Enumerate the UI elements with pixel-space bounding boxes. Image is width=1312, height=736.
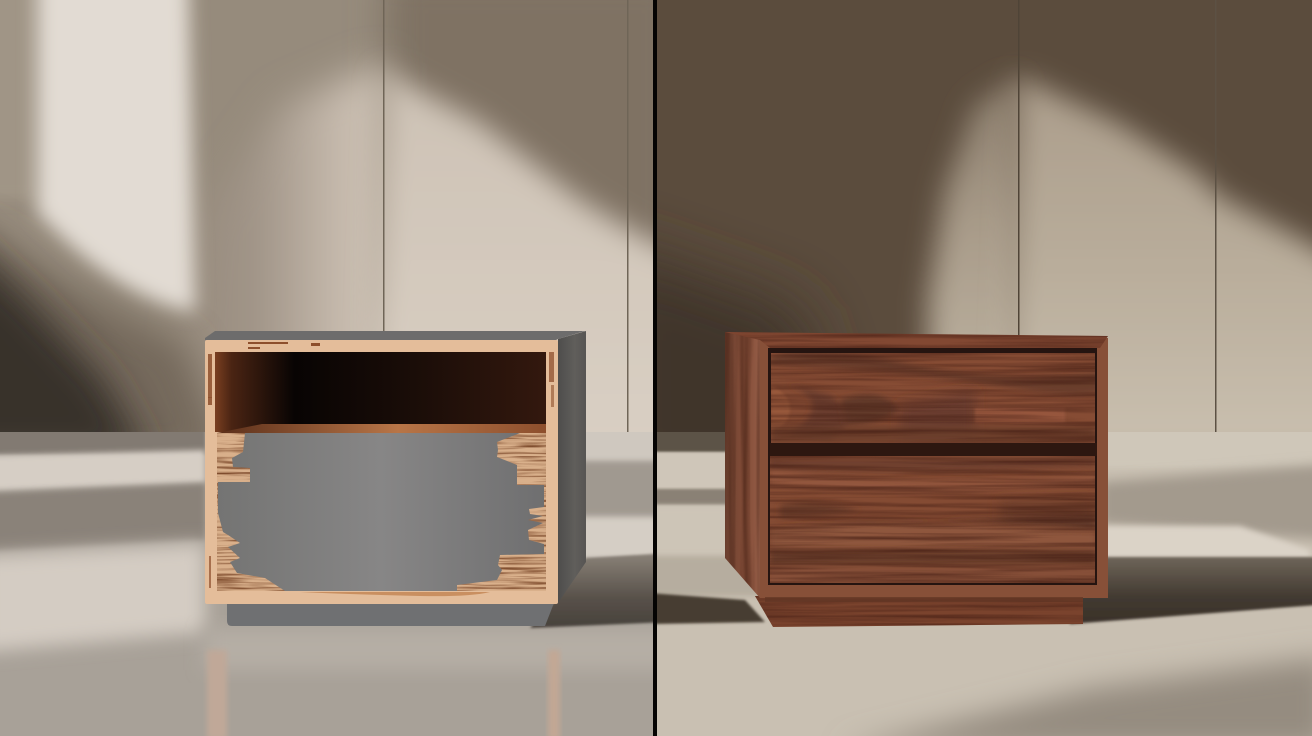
base plinth xyxy=(755,596,1083,627)
left floor xyxy=(0,425,680,736)
bottom drawer xyxy=(770,456,1095,583)
lower ledge xyxy=(760,585,1108,598)
exposed wood panel xyxy=(217,433,546,591)
drawer gap xyxy=(770,443,1097,456)
right panel: walnut nightstand xyxy=(600,0,1312,736)
left panel: damaged nightstand xyxy=(0,0,690,736)
frame chips and damage xyxy=(208,342,554,588)
drawer recess xyxy=(768,348,1097,585)
front frame xyxy=(760,338,1108,598)
right wall panel seams xyxy=(1018,0,1020,335)
walnut nightstand xyxy=(725,332,1108,627)
plywood frame xyxy=(205,340,558,604)
dark opening xyxy=(215,352,546,432)
side panel xyxy=(725,332,760,598)
wall panel seams xyxy=(383,0,384,331)
damaged nightstand xyxy=(205,331,586,626)
shelf edge xyxy=(217,424,546,433)
right floor xyxy=(650,425,1312,736)
worn grey laminate xyxy=(218,433,544,591)
top drawer xyxy=(770,349,1100,443)
grey side panel xyxy=(558,331,586,603)
right wall xyxy=(657,0,1312,432)
left wall xyxy=(0,0,653,432)
grey top xyxy=(205,331,585,340)
plinth shadow strip xyxy=(765,597,1083,602)
lower frame shadow xyxy=(300,592,490,596)
top surface xyxy=(725,332,1108,348)
plinth xyxy=(227,603,554,626)
center divider xyxy=(653,0,657,736)
